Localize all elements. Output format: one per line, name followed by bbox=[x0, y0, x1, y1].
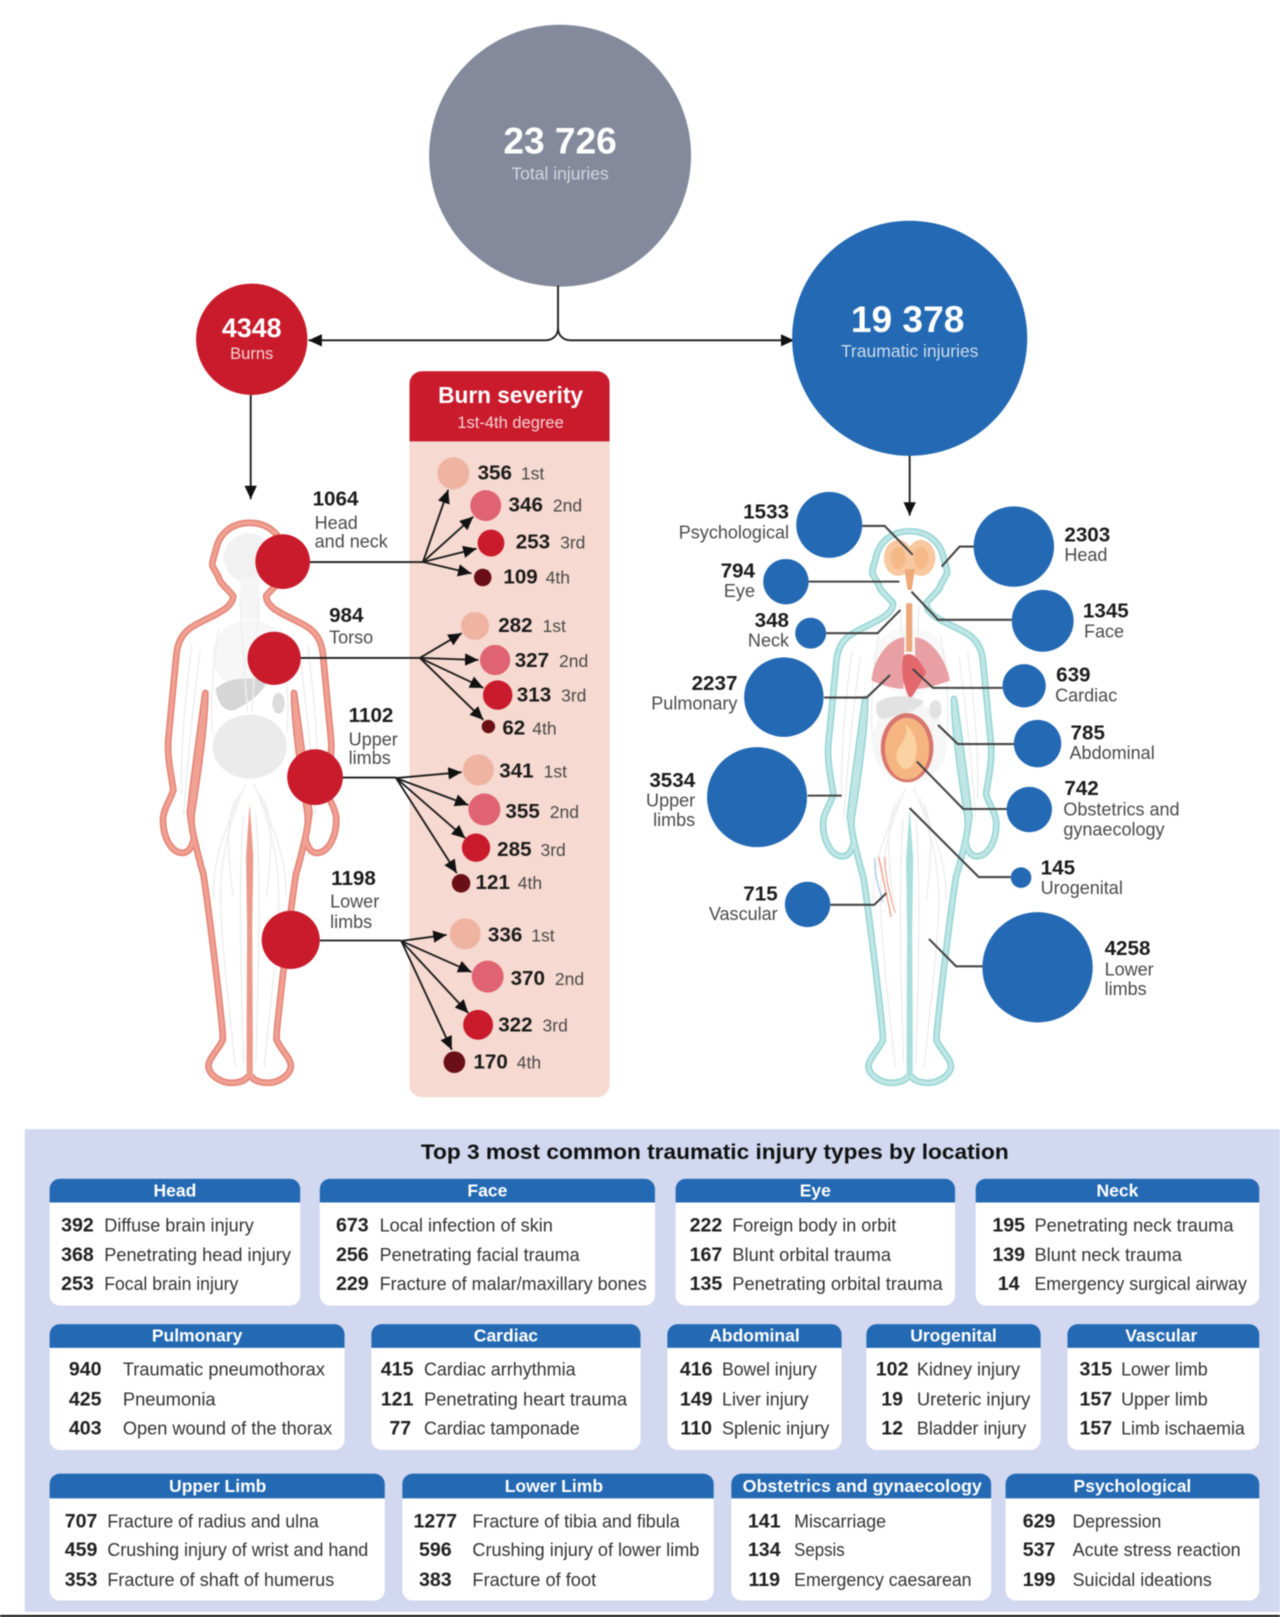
traumatic group: neck: Neck bbox=[748, 631, 790, 651]
card header bbox=[50, 1324, 345, 1348]
card: Neck: 139 bbox=[992, 1244, 1025, 1266]
card header: Obstetrics and gynaecology bbox=[743, 1476, 982, 1496]
card: Face: Fracture of malar/maxillary bones bbox=[380, 1273, 647, 1294]
group: head and neck burns bbox=[255, 487, 477, 589]
circle: burns: 4348 bbox=[222, 313, 282, 343]
traumatic group: obstetrics and gynaecology: 742 bbox=[1064, 777, 1099, 800]
card: Vascular: 157 bbox=[1079, 1389, 1112, 1411]
burn severity values: torso: 282 bbox=[498, 614, 533, 637]
traumatic group: abdominal: Abdominal bbox=[1070, 743, 1155, 763]
traumatic group: vascular: Vascular bbox=[709, 904, 778, 924]
card: Face: Penetrating facial trauma bbox=[380, 1244, 580, 1265]
card header bbox=[667, 1324, 842, 1348]
organ: brain bbox=[884, 540, 935, 590]
card header: Urogenital bbox=[910, 1326, 997, 1346]
card header: Eye bbox=[800, 1180, 831, 1200]
card: Face bbox=[320, 1179, 655, 1306]
burn severity values: lower limbs bbox=[444, 918, 584, 1073]
card: Head bbox=[50, 1179, 300, 1306]
card: Head: Penetrating head injury bbox=[104, 1244, 292, 1265]
circle: total injuries bbox=[429, 25, 691, 287]
burn severity values: head and neck: 346 bbox=[509, 494, 543, 517]
card: Urogenital: 12 bbox=[881, 1417, 903, 1439]
traumatic group: head: Head bbox=[1064, 545, 1107, 565]
traumatic group: pulmonary: 2237 bbox=[692, 672, 737, 695]
traumatic group: cardiac bbox=[913, 664, 1117, 707]
card header bbox=[402, 1474, 714, 1498]
burn severity values: torso: 327 bbox=[515, 649, 549, 672]
traumatic group: abdominal bbox=[938, 720, 1155, 767]
traumatic group: psychological: Psychological bbox=[679, 522, 789, 542]
card: Lower Limb: 383 bbox=[419, 1569, 452, 1591]
card: Cardiac bbox=[371, 1324, 641, 1450]
circle: traumatic injuries: 19 378 bbox=[851, 298, 964, 340]
card header bbox=[866, 1324, 1041, 1348]
card: Urogenital: 19 bbox=[881, 1389, 903, 1411]
card: Vascular: Limb ischaemia bbox=[1121, 1417, 1245, 1438]
card: Obstetrics and gynaecology: Sepsis bbox=[794, 1539, 845, 1560]
card: Eye: 222 bbox=[690, 1214, 722, 1236]
traumatic group: head bbox=[942, 506, 1110, 587]
card: Psychological: 629 bbox=[1023, 1510, 1056, 1532]
burn severity values: upper limbs: 341 bbox=[499, 760, 534, 783]
card: Obstetrics and gynaecology: 134 bbox=[748, 1539, 781, 1561]
card: Lower Limb bbox=[402, 1474, 714, 1600]
card: Psychological: Depression bbox=[1073, 1510, 1161, 1531]
burn severity values: lower limbs: 336 bbox=[488, 924, 522, 947]
card: Cardiac: Cardiac tamponade bbox=[424, 1417, 580, 1438]
traumatic group: upper limbs: limbs bbox=[653, 810, 695, 830]
card: Upper Limb bbox=[50, 1474, 385, 1600]
group: upper limb burns: Upper bbox=[349, 730, 398, 750]
card header bbox=[1006, 1474, 1259, 1498]
traumatic group: face: Face bbox=[1084, 621, 1124, 641]
burn severity values: torso: 4th bbox=[532, 718, 557, 738]
card: Face: 229 bbox=[336, 1273, 369, 1295]
card: Lower Limb: Crushing injury of lower limb bbox=[472, 1539, 699, 1560]
card: Eye: Penetrating orbital trauma bbox=[732, 1273, 943, 1294]
traumatic group: urogenital bbox=[910, 808, 1123, 898]
traumatic group: lower limbs: 4258 bbox=[1105, 937, 1150, 960]
card: Eye bbox=[676, 1179, 955, 1306]
group: head and neck burns: Head bbox=[315, 513, 358, 533]
burn severity values: upper limbs bbox=[452, 754, 579, 894]
burn severity values: upper limbs: 355 bbox=[505, 800, 540, 823]
burn severity values: upper limbs: 285 bbox=[497, 838, 532, 861]
traumatic group: cardiac: Cardiac bbox=[1055, 685, 1117, 705]
circle: traumatic injuries: Traumatic injuries bbox=[841, 341, 979, 361]
burn severity values: torso: 62 bbox=[502, 716, 525, 739]
card header bbox=[976, 1179, 1259, 1202]
card: Psychological: Suicidal ideations bbox=[1073, 1569, 1212, 1590]
group: upper limb burns: 1102 bbox=[349, 704, 393, 727]
leg blood vessels bbox=[875, 857, 895, 917]
card: Vascular: Upper limb bbox=[1121, 1389, 1208, 1410]
burn severity values: upper limbs: 4th bbox=[518, 873, 542, 893]
traumatic group: neck: 348 bbox=[755, 609, 789, 632]
burn severity values: head and neck: 1st bbox=[521, 464, 544, 484]
traumatic group: cardiac: 639 bbox=[1056, 664, 1090, 687]
traumatic group: eye bbox=[721, 559, 899, 604]
burn severity values: upper limbs: 3rd bbox=[540, 840, 566, 860]
card: Eye: 167 bbox=[690, 1244, 722, 1266]
card: Head: Diffuse brain injury bbox=[104, 1214, 254, 1235]
card: Obstetrics and gynaecology: Miscarriage bbox=[794, 1510, 886, 1531]
card header bbox=[371, 1324, 641, 1348]
card: Vascular: Lower limb bbox=[1121, 1359, 1208, 1380]
card: Lower Limb: 1277 bbox=[414, 1510, 457, 1532]
card header bbox=[1067, 1324, 1259, 1348]
card: Abdominal bbox=[667, 1324, 842, 1450]
card: Abdominal: 110 bbox=[680, 1417, 712, 1439]
group: torso burns bbox=[248, 604, 483, 720]
traumatic group: psychological: 1533 bbox=[743, 501, 789, 524]
card: Upper Limb: Fracture of shaft of humerus bbox=[107, 1569, 334, 1590]
group: torso burns: 984 bbox=[329, 604, 364, 627]
burn severity values: torso: 3rd bbox=[561, 685, 586, 705]
traumatic group: pulmonary bbox=[651, 657, 890, 737]
card: Obstetrics and gynaecology bbox=[731, 1474, 991, 1600]
card: Abdominal: 416 bbox=[680, 1359, 713, 1381]
card: Neck bbox=[976, 1179, 1259, 1306]
card: Abdominal: 149 bbox=[680, 1389, 713, 1411]
group: torso burns: Torso bbox=[329, 628, 373, 648]
card: Neck: Emergency surgical airway bbox=[1034, 1273, 1248, 1294]
card header: Vascular bbox=[1125, 1326, 1198, 1346]
burn severity values: torso: 2nd bbox=[559, 651, 588, 671]
burn severity values: upper limbs: 2nd bbox=[550, 802, 579, 822]
organ: heart bbox=[902, 654, 926, 699]
card header bbox=[50, 1474, 385, 1498]
arrow: burns to body bbox=[250, 395, 252, 499]
card: Urogenital: Bladder injury bbox=[917, 1417, 1027, 1438]
card: Eye: Blunt orbital trauma bbox=[732, 1244, 892, 1265]
traumatic group: head: 2303 bbox=[1064, 523, 1110, 546]
panel: burn severity bbox=[410, 371, 610, 1097]
burn severity values: lower limbs: 2nd bbox=[555, 969, 584, 989]
traumatic group: face bbox=[911, 590, 1129, 652]
circle: burns bbox=[196, 284, 307, 395]
group: upper limb burns: limbs bbox=[349, 748, 391, 768]
card header bbox=[676, 1179, 955, 1202]
card header bbox=[50, 1179, 300, 1202]
burn severity values: head and neck: 253 bbox=[516, 531, 550, 554]
burn severity values: head and neck: 2nd bbox=[553, 496, 582, 516]
card: Upper Limb: 353 bbox=[65, 1569, 98, 1591]
card: Neck: Blunt neck trauma bbox=[1034, 1244, 1183, 1265]
body figure: burns bbox=[163, 523, 336, 1083]
traumatic group: vascular: 715 bbox=[743, 882, 778, 905]
card: Lower Limb: Fracture of foot bbox=[472, 1569, 597, 1590]
traumatic group: abdominal: 785 bbox=[1071, 721, 1105, 744]
card: Psychological: 199 bbox=[1023, 1569, 1056, 1591]
burn severity values: lower limbs: 3rd bbox=[543, 1015, 568, 1035]
card: Pulmonary: 940 bbox=[69, 1359, 102, 1381]
burn severity values: lower limbs: 322 bbox=[498, 1013, 533, 1036]
card: Face: Local infection of skin bbox=[380, 1214, 553, 1235]
card: Eye: 135 bbox=[690, 1273, 722, 1295]
panel header bbox=[410, 371, 610, 441]
traumatic group: pulmonary: Pulmonary bbox=[651, 694, 737, 714]
card: Eye: Foreign body in orbit bbox=[732, 1214, 897, 1235]
burn severity values: lower limbs: 4th bbox=[517, 1052, 541, 1072]
panel header: 1st-4th degree bbox=[457, 414, 564, 432]
organ: trachea bbox=[906, 603, 912, 652]
traumatic group: obstetrics and gynaecology: gynaecology bbox=[1063, 819, 1165, 839]
card: Cardiac: Penetrating heart trauma bbox=[424, 1389, 628, 1410]
card: Cardiac: 121 bbox=[381, 1389, 414, 1411]
card: Face: 256 bbox=[336, 1244, 369, 1266]
traumatic group: eye: Eye bbox=[724, 581, 755, 601]
card: Abdominal: Splenic injury bbox=[722, 1417, 830, 1438]
burn severity values: lower limbs: 170 bbox=[473, 1050, 508, 1073]
card: Pulmonary bbox=[50, 1324, 345, 1450]
panel: top 3 most common traumatic injury types bbox=[25, 1129, 1280, 1612]
burn severity values: head and neck: 356 bbox=[478, 462, 512, 485]
traumatic group: lower limbs: limbs bbox=[1105, 979, 1147, 999]
burn severity values: head and neck: 109 bbox=[503, 566, 538, 589]
body figure: traumatic injuries bbox=[823, 531, 996, 1083]
burn severity values: upper limbs: 121 bbox=[476, 871, 510, 894]
card: Urogenital: Ureteric injury bbox=[917, 1389, 1031, 1410]
panel header: Burn severity bbox=[438, 382, 583, 408]
arrow: traumatic injuries to body bbox=[909, 456, 911, 516]
card: Abdominal: Liver injury bbox=[722, 1389, 809, 1410]
circle: burns: Burns bbox=[230, 345, 273, 363]
card: Urogenital: Kidney injury bbox=[917, 1359, 1021, 1380]
group: lower limb burns bbox=[262, 867, 471, 1050]
burn severity values: upper limbs: 1st bbox=[544, 762, 567, 782]
card header: Cardiac bbox=[474, 1326, 538, 1346]
card: Obstetrics and gynaecology: 119 bbox=[748, 1569, 780, 1591]
card: Pulmonary: Pneumonia bbox=[123, 1389, 216, 1410]
card: Cardiac: Cardiac arrhythmia bbox=[424, 1359, 576, 1380]
card header: Lower Limb bbox=[505, 1476, 603, 1496]
card: Neck: 195 bbox=[992, 1214, 1025, 1236]
card: Vascular: 157 bbox=[1079, 1417, 1112, 1439]
traumatic group: vascular bbox=[709, 882, 886, 927]
traumatic group: neck bbox=[748, 609, 900, 651]
group: lower limb burns: limbs bbox=[330, 912, 372, 932]
burn severity values: head and neck: 3rd bbox=[560, 533, 585, 553]
traumatic group: upper limbs bbox=[646, 747, 842, 847]
card: Pulmonary: 403 bbox=[69, 1417, 102, 1439]
card: Head: 253 bbox=[61, 1273, 94, 1295]
burn severity values: lower limbs: 1st bbox=[531, 926, 555, 946]
card: Cardiac: 77 bbox=[389, 1417, 411, 1439]
card header bbox=[320, 1179, 655, 1202]
traumatic group: lower limbs bbox=[929, 912, 1154, 1022]
card: Psychological bbox=[1006, 1474, 1259, 1600]
card: Vascular bbox=[1067, 1324, 1259, 1450]
circle: traumatic injuries bbox=[792, 221, 1027, 456]
group: head and neck burns: and neck bbox=[315, 532, 389, 552]
traumatic group: face: 1345 bbox=[1083, 600, 1129, 623]
card: Pulmonary: 425 bbox=[69, 1389, 102, 1411]
traumatic group: obstetrics and gynaecology bbox=[917, 762, 1180, 839]
card: Psychological: Acute stress reaction bbox=[1073, 1539, 1241, 1560]
card header: Upper Limb bbox=[169, 1476, 266, 1496]
card: Upper Limb: 459 bbox=[65, 1539, 98, 1561]
group: lower limb burns: Lower bbox=[330, 892, 379, 912]
card: Head: 392 bbox=[61, 1214, 94, 1236]
card: Pulmonary: Open wound of the thorax bbox=[123, 1417, 333, 1438]
card: Urogenital: 102 bbox=[876, 1359, 909, 1381]
organ: uterus with fetus bbox=[881, 713, 933, 782]
card: Urogenital bbox=[866, 1324, 1041, 1450]
traumatic group: upper limbs: 3534 bbox=[649, 769, 696, 792]
card: Neck: 14 bbox=[998, 1273, 1020, 1295]
card header: Head bbox=[153, 1180, 196, 1200]
card: Neck: Penetrating neck trauma bbox=[1034, 1214, 1234, 1235]
panel title: Top 3 most common traumatic injury types by location bbox=[421, 1139, 1009, 1164]
card header: Face bbox=[467, 1180, 508, 1200]
organ: lungs bbox=[872, 637, 950, 689]
traumatic group: upper limbs: Upper bbox=[646, 790, 695, 810]
card header: Abdominal bbox=[709, 1326, 800, 1346]
card: Cardiac: 415 bbox=[381, 1359, 414, 1381]
group: head and neck burns: 1064 bbox=[313, 487, 359, 510]
card header: Pulmonary bbox=[152, 1326, 243, 1346]
burn severity values: head and neck: 4th bbox=[546, 568, 570, 588]
traumatic group: obstetrics and gynaecology: Obstetrics and bbox=[1063, 800, 1180, 820]
group: lower limb burns: 1198 bbox=[331, 867, 376, 890]
card header: Psychological bbox=[1074, 1476, 1191, 1496]
traumatic group: psychological bbox=[679, 492, 913, 558]
traumatic group: lower limbs: Lower bbox=[1105, 960, 1154, 980]
burn severity values: torso: 1st bbox=[543, 616, 566, 636]
card: Upper Limb: Crushing injury of wrist and hand bbox=[107, 1539, 368, 1560]
card header: Neck bbox=[1097, 1180, 1139, 1200]
burn severity values: lower limbs: 370 bbox=[511, 967, 545, 990]
branching connector from total to burns and traumatic injuries bbox=[308, 286, 794, 340]
card: Face: 673 bbox=[336, 1214, 369, 1236]
organs: liver and kidney bbox=[876, 696, 942, 719]
group: upper limb burns bbox=[287, 704, 468, 873]
burn severity values: torso: 313 bbox=[517, 683, 551, 706]
card: Psychological: 537 bbox=[1023, 1539, 1056, 1561]
card: Obstetrics and gynaecology: Emergency caesarean bbox=[794, 1569, 972, 1590]
traumatic group: eye: 794 bbox=[721, 560, 756, 583]
card: Head: 368 bbox=[61, 1244, 94, 1266]
card: Lower Limb: Fracture of tibia and fibula bbox=[472, 1510, 680, 1531]
card: Obstetrics and gynaecology: 141 bbox=[748, 1510, 781, 1532]
card: Abdominal: Bowel injury bbox=[722, 1359, 818, 1380]
traumatic group: urogenital: 145 bbox=[1041, 857, 1075, 880]
card: Upper Limb: 707 bbox=[65, 1510, 98, 1532]
card: Head: Focal brain injury bbox=[104, 1273, 239, 1294]
burn severity values: head and neck bbox=[437, 457, 585, 589]
circle: total injuries: 23 726 bbox=[503, 120, 617, 162]
card: Lower Limb: 596 bbox=[419, 1539, 452, 1561]
card: Upper Limb: Fracture of radius and ulna bbox=[107, 1510, 319, 1531]
circle: total injuries: Total injuries bbox=[511, 163, 609, 183]
card: Pulmonary: Traumatic pneumothorax bbox=[123, 1359, 326, 1380]
burn severity values: torso bbox=[461, 612, 588, 739]
card: Vascular: 315 bbox=[1079, 1359, 1112, 1381]
traumatic group: urogenital: Urogenital bbox=[1041, 878, 1123, 898]
